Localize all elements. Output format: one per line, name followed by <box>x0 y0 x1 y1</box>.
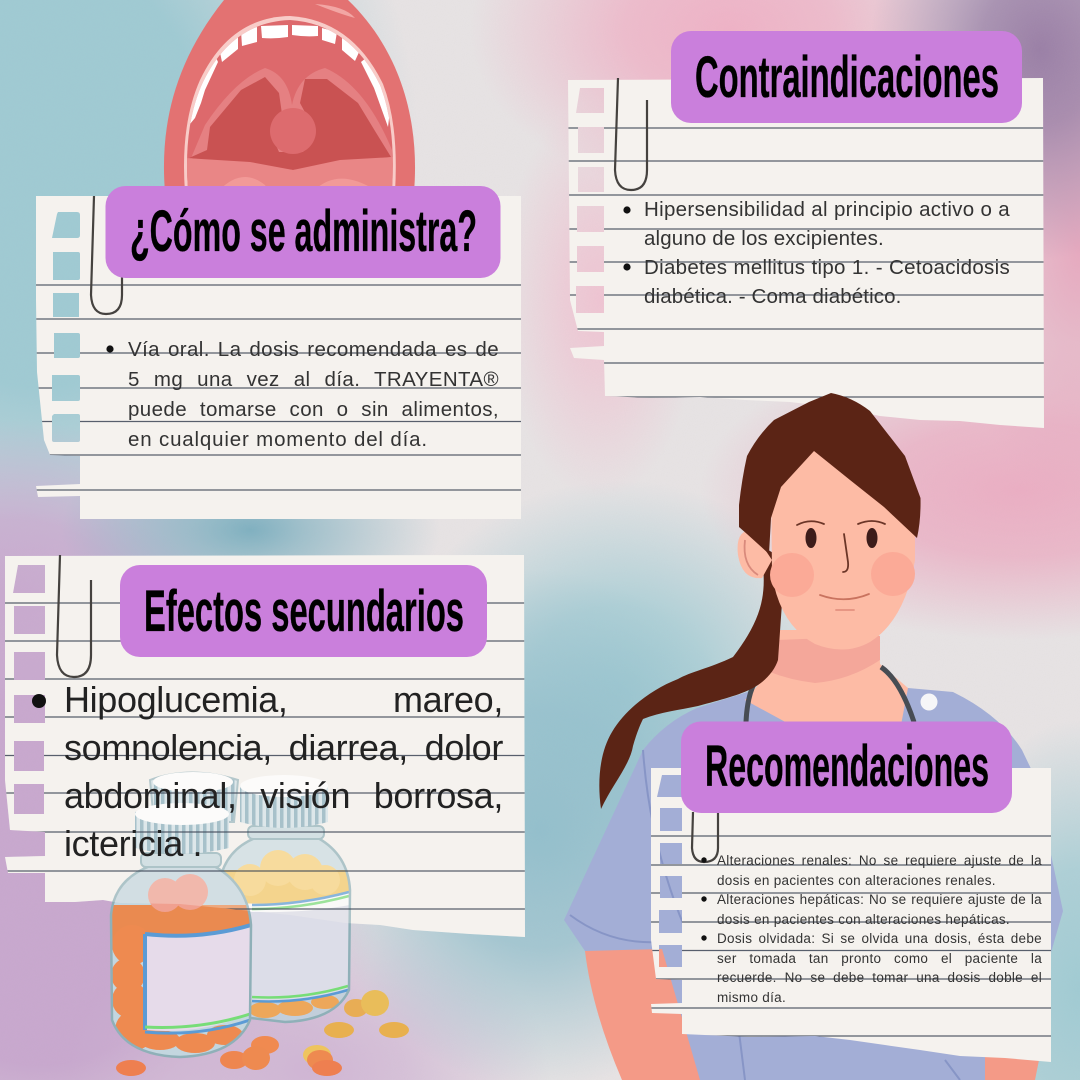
text block: efectos: somnolencia, diarrea, dolor <box>64 727 503 768</box>
orange pills <box>112 905 250 940</box>
illustration: nurse <box>564 393 1063 1080</box>
icon: paperclip <box>57 555 91 677</box>
bullets <box>701 857 707 941</box>
neck and chest <box>745 630 908 730</box>
badge button <box>920 694 938 710</box>
heading pill: Recomendaciones <box>681 722 1012 813</box>
back bottle <box>220 775 350 1022</box>
arms <box>585 949 1040 1080</box>
bullets <box>623 206 631 271</box>
text block: administracion: Vía oral. La dosis recomendada es de <box>128 338 499 361</box>
text block: recomendaciones: Alteraciones hepáticas: No se requiere ajuste de la <box>717 892 1042 907</box>
note paper with punched holes <box>36 196 521 519</box>
translucent paper veil over bottles <box>5 555 525 937</box>
text block: contraindicaciones: alguno de los excipientes. <box>644 227 884 250</box>
text block: contraindicaciones: diabética. - Coma diabético. <box>644 285 901 308</box>
text block: recomendaciones <box>717 851 1042 1009</box>
loose pills <box>116 990 409 1076</box>
heading pill: Contraindicaciones <box>671 31 1022 123</box>
ruled lines <box>34 285 523 490</box>
face <box>771 446 915 650</box>
front neck and cap <box>141 853 221 867</box>
note paper with punched holes <box>568 78 1044 428</box>
ruled lines <box>3 603 527 909</box>
throat <box>189 77 391 170</box>
text block: efectos: ictericia . <box>64 823 202 864</box>
third bottle cap behind <box>150 772 238 822</box>
text block: recomendaciones: recuerde. No se debe tomar una dosis doble el <box>717 970 1042 985</box>
note paper with punched holes <box>651 768 1051 1062</box>
illustration: open mouth <box>164 0 415 195</box>
ponytail <box>599 545 785 809</box>
panel: como se administra <box>34 186 523 519</box>
text block: administracion <box>128 335 499 459</box>
lips <box>164 0 415 192</box>
bullet <box>106 345 114 353</box>
yellow pills <box>220 870 350 905</box>
tongue <box>187 157 393 186</box>
heading pill: ¿Cómo se administra? <box>106 186 500 278</box>
back label <box>248 894 348 1002</box>
note paper with punched holes <box>5 555 525 937</box>
teeth <box>190 25 390 127</box>
cheeks <box>770 552 915 597</box>
text block: recomendaciones: mismo día. <box>717 990 786 1004</box>
illustration: medicine bottles <box>111 772 409 1076</box>
inner lip rim <box>184 16 396 192</box>
heading pill: ¿Cómo se administra?: ¿Cómo se administra? <box>130 199 477 264</box>
heading pill: Efectos secundarios: Efectos secundarios <box>144 579 464 644</box>
scrub seams <box>570 750 960 1080</box>
text block: contraindicaciones: Hipersensibilidad al principio activo o a <box>644 198 1010 221</box>
mouth interior <box>187 20 393 186</box>
text block: administracion: puede tomarse con o sin alimentos, <box>128 398 499 421</box>
text block: contraindicaciones: Diabetes mellitus tipo 1. - Cetoacidosis <box>644 256 1010 279</box>
uvula <box>270 108 316 154</box>
text block: efectos: abdominal, visión borrosa, <box>64 775 503 816</box>
palate arches <box>191 68 392 158</box>
panel: efectos secundarios <box>3 555 527 1076</box>
ear <box>738 530 772 578</box>
text block: recomendaciones: ser tomada tan pronto como el paciente la <box>717 950 1042 966</box>
heading pill: Efectos secundarios <box>120 565 487 657</box>
text block: recomendaciones: Dosis olvidada: Si se olvida una dosis, ésta debe <box>717 931 1042 946</box>
scrubs body <box>564 688 1063 1080</box>
text block: administracion: 5 mg una vez al día. TRAYENTA® <box>128 368 499 391</box>
stethoscope <box>746 667 914 722</box>
eyebrows, nose, smile <box>797 521 885 610</box>
text block: efectos: Hipoglucemia, mareo, <box>64 679 503 720</box>
panel: contraindicaciones <box>566 31 1046 428</box>
text block: recomendaciones: dosis en pacientes con alteraciones renales. <box>717 872 996 888</box>
ruled lines <box>566 128 1046 397</box>
bullet <box>32 694 46 708</box>
eyes <box>806 528 878 548</box>
text block: contraindicaciones <box>644 195 1010 315</box>
hair <box>739 393 921 554</box>
text block: administracion: en cualquier momento del día. <box>128 428 428 451</box>
icon: paperclip <box>615 78 647 190</box>
text block: efectos <box>64 676 503 872</box>
text block: recomendaciones: Alteraciones renales: No se requiere ajuste de la <box>717 853 1042 868</box>
text block: recomendaciones: dosis en pacientes con alteraciones hepáticas. <box>717 912 1010 926</box>
icon: paperclip <box>91 196 122 314</box>
panel: recomendaciones <box>650 722 1053 1062</box>
icon: paperclip <box>692 812 718 862</box>
front label <box>145 925 251 1031</box>
front bottle <box>111 803 251 1057</box>
back neck and cap <box>248 826 324 839</box>
ruled lines <box>650 836 1053 1036</box>
